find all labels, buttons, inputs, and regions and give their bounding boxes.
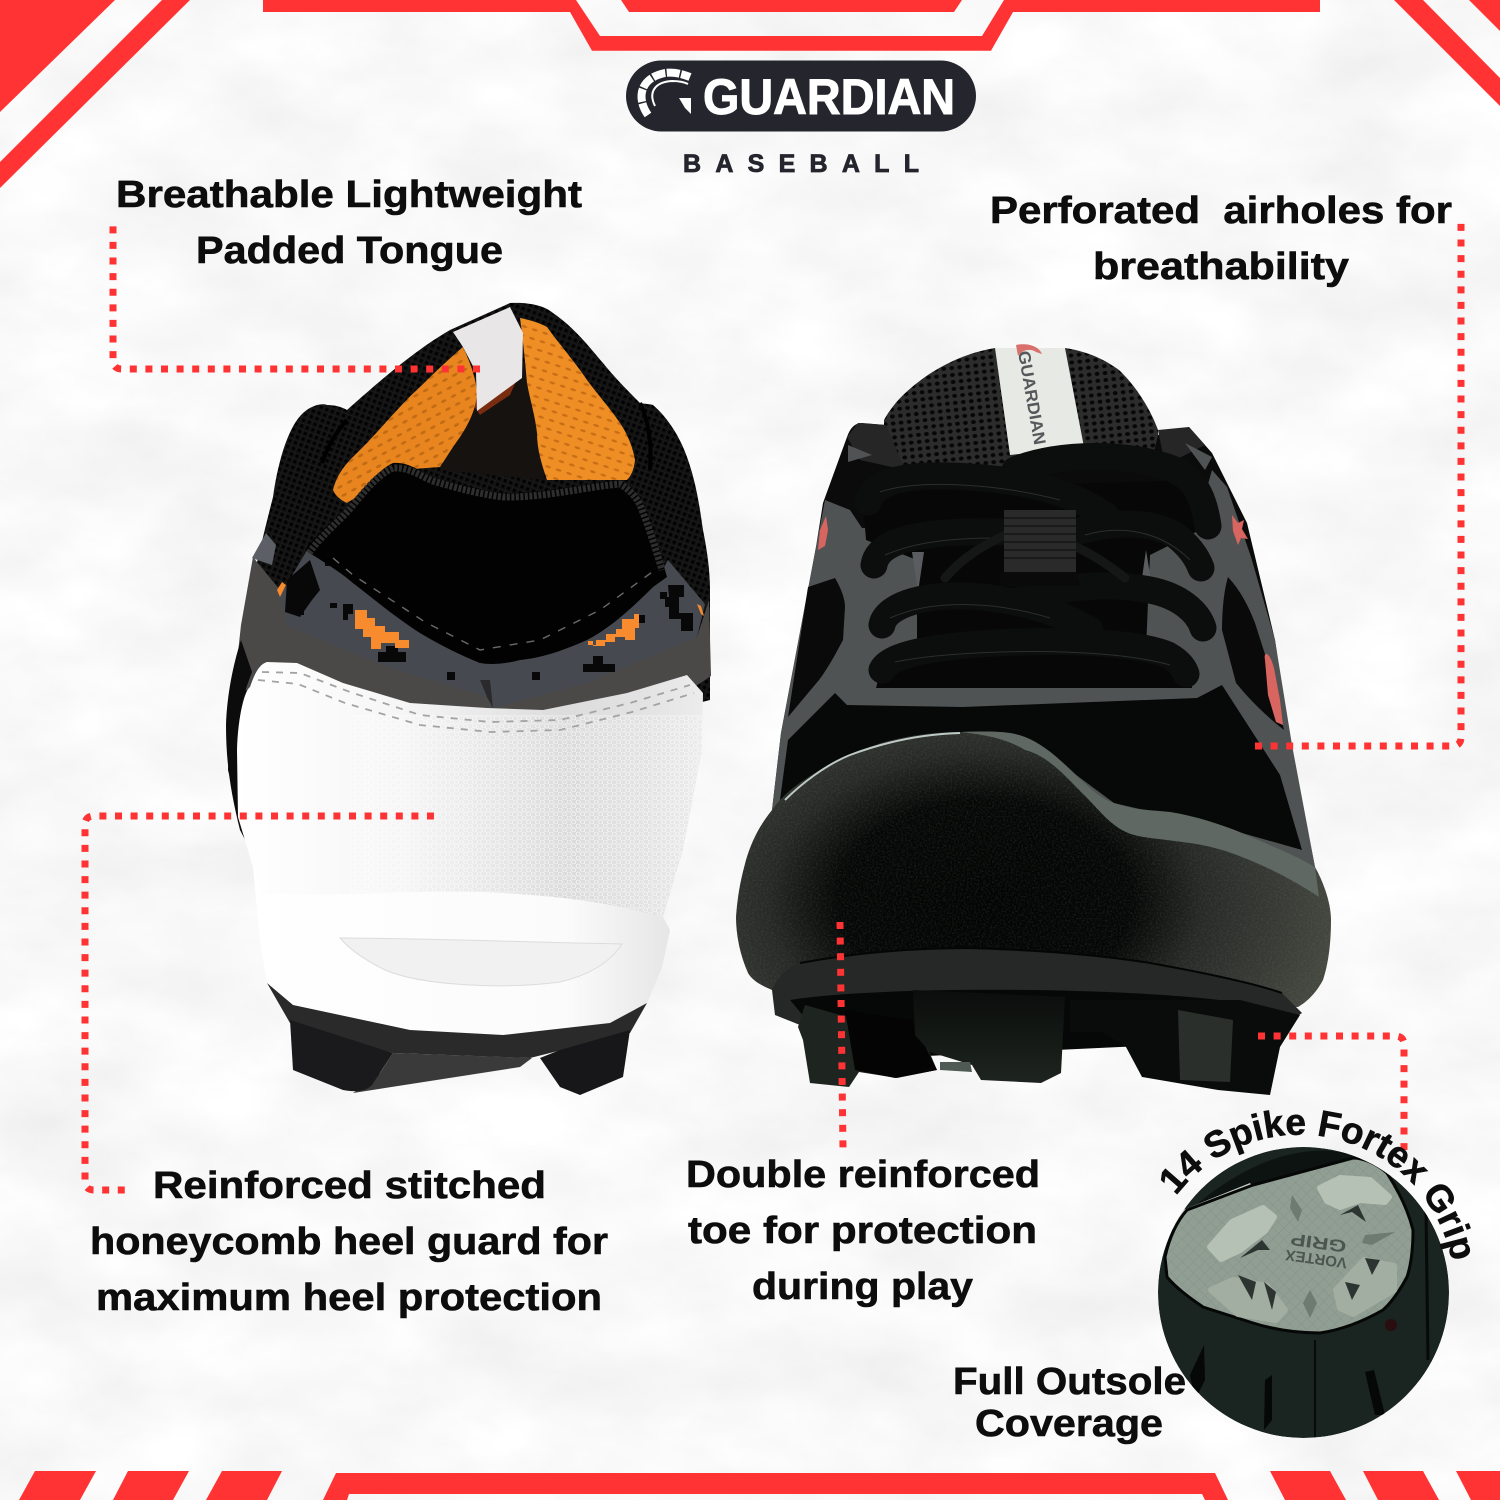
white foxing — [253, 867, 670, 1035]
white heel counter with honeycomb — [237, 662, 703, 1035]
callout: heel guard — [90, 1165, 608, 1319]
logo subtitle: BASEBALL — [683, 150, 919, 178]
bottom frame decoration — [19, 1471, 1500, 1500]
top frame decoration — [0, 0, 1500, 188]
tread — [1190, 1345, 1385, 1430]
callout: heel guard: Reinforced stitched — [153, 1165, 546, 1207]
right cleat — [540, 1030, 630, 1095]
plate cleats — [1210, 1178, 1394, 1320]
wordmark: GUARDIAN — [703, 69, 955, 125]
sole shadow — [353, 1053, 532, 1093]
inner collar fold — [322, 403, 651, 470]
callout: outsole coverage: Coverage — [975, 1403, 1163, 1445]
lace keeper loop — [1000, 510, 1080, 586]
black side strip — [226, 640, 258, 865]
left side panel — [788, 578, 845, 717]
tongue mesh — [884, 348, 1160, 500]
tongue pull tab — [453, 307, 523, 411]
right tongue lining, orange mesh — [520, 318, 635, 480]
leader: tongue — [113, 224, 480, 369]
right side panel — [1222, 577, 1284, 730]
callout: heel guard: honeycomb heel guard for — [90, 1221, 608, 1263]
front left cleat — [798, 1005, 937, 1087]
left shoe: heel view — [226, 303, 711, 1095]
leader: airholes — [1255, 221, 1461, 746]
callout: heel guard: maximum heel protection — [96, 1277, 602, 1319]
sliver highlight — [1173, 1183, 1251, 1228]
cleat shadows — [1238, 1205, 1380, 1310]
sole plate — [1165, 1158, 1413, 1333]
plate side detail — [1385, 1319, 1397, 1331]
eyestay slivers — [912, 550, 1153, 592]
front right cleat — [1070, 1000, 1300, 1095]
callout: airholes: breathability — [1093, 246, 1349, 288]
dark heel edge — [1196, 1150, 1366, 1204]
tongue label — [995, 344, 1084, 455]
plate diamonds — [1290, 1195, 1395, 1318]
curved heading: spike grip: 14 Spike Fortex Grip — [1160, 1110, 1471, 1259]
lace crossing — [945, 535, 1125, 578]
right shoe: front view — [730, 344, 1340, 1095]
logo pill — [626, 60, 976, 132]
leader: heel guard — [85, 816, 434, 1190]
black padded heel tab — [305, 463, 667, 664]
laces — [868, 456, 1208, 674]
callout: toe protection: Double reinforced — [686, 1154, 1040, 1196]
collar mesh details — [847, 423, 905, 470]
black vamp — [780, 685, 1302, 850]
tongue label: GUARDIAN — [1014, 349, 1049, 446]
logo: Guardian Baseball — [626, 60, 976, 178]
welt — [772, 948, 1302, 1027]
callout: padded tongue: Padded Tongue — [196, 230, 503, 272]
inset: sole close-up — [1150, 1147, 1449, 1438]
callout: padded tongue — [116, 174, 582, 272]
leader: toe — [840, 922, 843, 1148]
gray lacing frame — [772, 470, 1315, 867]
leader: outsole grip — [1258, 1036, 1404, 1150]
callout: toe protection — [686, 1154, 1040, 1308]
toe band — [961, 732, 1319, 897]
double stitching — [258, 672, 694, 732]
callout: airholes: Perforated airholes for — [990, 190, 1452, 232]
left cleat — [290, 1020, 393, 1091]
front center cleat — [913, 990, 1065, 1083]
toe cap — [736, 732, 1331, 1007]
inset base — [1158, 1147, 1449, 1438]
underside — [790, 990, 1280, 1060]
left tongue lining, orange mesh — [333, 347, 477, 503]
gray heel body — [235, 557, 711, 725]
callout: toe protection: during play — [752, 1266, 973, 1308]
plate text — [1285, 1234, 1346, 1268]
icon: spartan helmet — [641, 73, 691, 115]
camo band — [252, 533, 705, 708]
upper body — [772, 423, 1315, 867]
callout leader lines — [85, 221, 1461, 1190]
outer collar mesh — [228, 303, 710, 820]
toe cap highlight — [785, 733, 960, 800]
side logo marks — [818, 515, 1283, 725]
plate text: GRIP — [1289, 1229, 1348, 1256]
black midsole — [267, 983, 647, 1058]
callout: padded tongue: Breathable Lightweight — [116, 174, 582, 216]
callout: airholes — [990, 190, 1452, 288]
plate text: VORTEX — [1284, 1246, 1348, 1271]
inner cavity — [440, 360, 545, 480]
callout: outsole coverage: Full Outsole — [953, 1361, 1186, 1403]
callout: toe protection: toe for protection — [688, 1210, 1037, 1252]
callout: outsole coverage — [953, 1361, 1186, 1445]
lace throat — [862, 480, 1200, 688]
